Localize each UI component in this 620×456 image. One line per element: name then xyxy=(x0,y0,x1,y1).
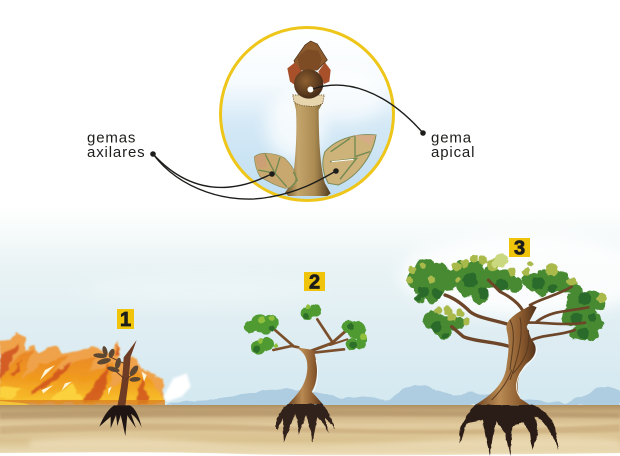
watercolor sky background xyxy=(0,205,620,410)
roots xyxy=(460,405,558,456)
badge 2: 2 xyxy=(309,272,320,294)
leader lines: gemas axilares xyxy=(150,151,339,199)
label: gemas axilares: axilares xyxy=(87,144,146,161)
label: gema apical: apical xyxy=(431,144,475,161)
burnt leaves xyxy=(93,346,141,382)
axillary bud left xyxy=(254,153,296,188)
badge 3 xyxy=(509,238,530,260)
foliage xyxy=(244,304,367,355)
trunk xyxy=(288,347,323,404)
mid green canopy xyxy=(407,258,606,341)
label: gemas axilares: gemas xyxy=(87,130,136,146)
yellow-green highlights xyxy=(406,254,606,325)
fire behind the first plant xyxy=(0,332,191,407)
axillary bud right xyxy=(323,135,376,185)
apical bud scales xyxy=(294,41,327,70)
magnifier circle with bud detail xyxy=(220,28,394,200)
ground xyxy=(0,405,620,456)
distant mountains xyxy=(165,385,620,406)
foliage xyxy=(406,253,606,341)
badge 1 xyxy=(117,309,134,331)
badge 1: 1 xyxy=(120,309,131,331)
white dot on apical bud xyxy=(308,86,314,92)
trunk xyxy=(117,340,137,406)
roots xyxy=(276,404,335,443)
circle backdrop xyxy=(222,78,392,199)
plant 1: burnt sapling with roots xyxy=(93,340,142,436)
bud illustration xyxy=(254,41,376,196)
label: gema apical: gema xyxy=(431,130,472,146)
badge 2 xyxy=(304,272,325,294)
branches xyxy=(273,319,347,353)
trunk xyxy=(475,305,537,405)
plant 3: large mature tree xyxy=(406,253,606,456)
badge 3: 3 xyxy=(514,238,525,260)
yellow ring xyxy=(220,28,394,200)
plant 2: young tree xyxy=(244,304,367,443)
leader line: gema apical xyxy=(313,85,426,136)
roots xyxy=(99,405,142,436)
branches xyxy=(445,280,588,347)
dark green shadows xyxy=(415,273,596,339)
stem xyxy=(285,102,331,196)
